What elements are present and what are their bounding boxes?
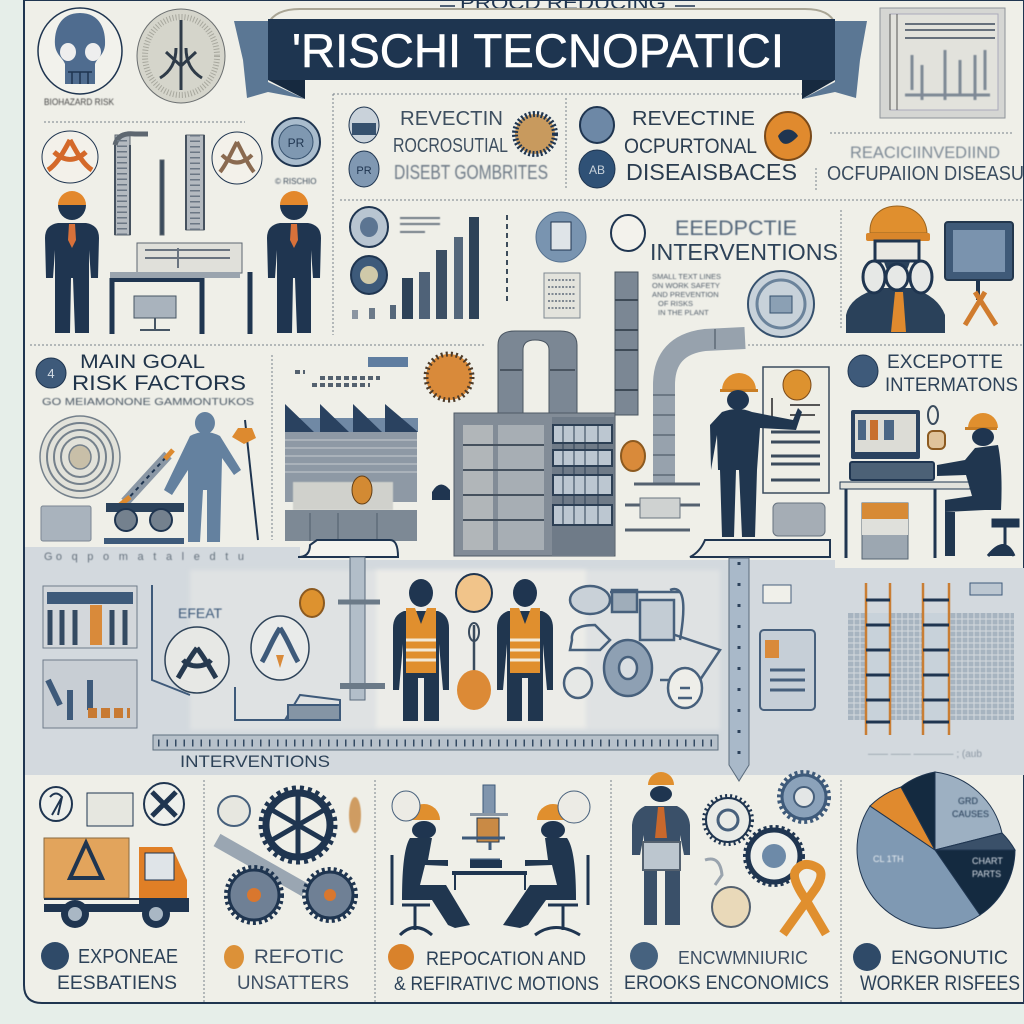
icon: biohazard dial [137, 9, 225, 103]
heading text: REVECTIN [400, 108, 503, 130]
label: REFOTIC [254, 947, 344, 968]
monitor [945, 222, 1013, 300]
heading text: EEEDPCTIE [675, 217, 797, 240]
label [853, 943, 1020, 995]
badge [848, 355, 878, 387]
label: EESBATIENS [57, 973, 177, 994]
panel: bar chart [350, 207, 479, 319]
ladder right [923, 583, 949, 735]
heading [885, 352, 1018, 396]
icon circles [350, 207, 388, 294]
desk [840, 482, 970, 558]
title banner: 'RISCHI TECNOPATICI [292, 24, 784, 77]
cabinet [862, 503, 908, 559]
icon: document badge [536, 212, 586, 262]
icon set: PR [356, 165, 372, 177]
icon: second biohazard [251, 616, 309, 680]
heading: INTERMATONS [885, 375, 1018, 396]
pie labels [873, 796, 1003, 879]
workers in vests [393, 574, 553, 721]
pie labels: PARTS [972, 869, 1001, 879]
truck [44, 838, 189, 928]
central factory [432, 272, 745, 556]
icon: mallet [457, 623, 491, 710]
label: & REFIRATIVC MOTIONS [394, 974, 599, 995]
heading text: INTERVENTIONS [650, 239, 838, 265]
hard hat [866, 206, 930, 241]
seated person [937, 413, 1018, 556]
body text lines: AND PREVENTION [652, 290, 719, 299]
conveyor arm [217, 840, 305, 890]
printer [773, 503, 825, 536]
icon: small orange coin [300, 589, 324, 617]
valve badge [621, 441, 645, 471]
label [624, 942, 829, 994]
side cabinet sketch [760, 585, 815, 710]
small icons [928, 406, 945, 449]
icon set: AB [589, 163, 605, 177]
worker left [45, 191, 99, 333]
panel: bottom ergonomics [624, 772, 829, 994]
text block: occupational disease [827, 143, 1024, 185]
label: ENGONUTIC [891, 948, 1008, 969]
coil [40, 416, 120, 498]
stack [615, 272, 638, 415]
icons [40, 783, 184, 826]
panel: reducing text block B [579, 107, 811, 188]
icon: maze badge [748, 271, 814, 337]
panel: reducing text block A [349, 107, 555, 187]
panel: executive interventions [773, 352, 1018, 559]
center stand [462, 785, 508, 868]
heading text: OCPURTONAL [624, 135, 757, 158]
grey interventions band [25, 547, 1024, 775]
table [452, 871, 527, 890]
small box [41, 506, 91, 541]
small machine sketch [152, 585, 340, 720]
desk with machine [110, 243, 250, 334]
worker right [267, 191, 321, 333]
heading: EXCEPOTTE [887, 352, 1003, 373]
T-connector right with arrow [690, 540, 830, 781]
icon: number badge [36, 358, 66, 388]
interventions label: INTERVENTIONS [180, 752, 330, 771]
pie labels: GRD [958, 796, 978, 806]
bars [352, 217, 479, 319]
worker figure [710, 373, 802, 537]
building [454, 413, 615, 556]
label [388, 944, 599, 995]
band heading text: EFEAT [178, 605, 223, 621]
pie chart [857, 772, 1015, 928]
grid panel [848, 613, 1014, 720]
keyboard [850, 462, 934, 480]
technical sheet [880, 8, 1005, 118]
vertical scale [506, 215, 508, 305]
chart legend lines [400, 218, 440, 232]
chart board [763, 367, 829, 493]
icon: skull [38, 8, 122, 94]
heading: MAIN GOAL [80, 352, 205, 373]
side machine [625, 484, 700, 530]
body text lines: IN THE PLANT [658, 308, 709, 317]
timeline bar [153, 735, 718, 750]
icon set [579, 107, 615, 188]
shelves [43, 586, 137, 728]
label: UNSATTERS [237, 973, 349, 994]
label: EXPONEAE [78, 946, 178, 968]
small caption under icons: BIOHAZARD RISK [44, 97, 114, 107]
heading text [611, 215, 838, 265]
body text lines: SMALL TEXT LINES [652, 272, 721, 281]
heading text: ROCROSUTIAL [393, 135, 508, 157]
body text lines: OF RISKS [658, 299, 693, 308]
duct [653, 329, 745, 484]
monitor [851, 410, 920, 459]
ladder left [866, 583, 890, 735]
pie labels: CL 1TH [873, 854, 904, 864]
dashed strip left [40, 570, 305, 576]
side note: © RISCHIO [275, 177, 316, 186]
icon set [349, 107, 379, 187]
panel: main goal risk factors [36, 352, 472, 544]
faint notes: —— —— ———— ; (aub [868, 749, 982, 760]
icon: number badge: 4 [47, 366, 55, 381]
panel: pie chart [853, 772, 1020, 995]
worker with laptop [632, 772, 690, 925]
small icons [218, 796, 361, 833]
panel: bottom truck [40, 783, 189, 994]
rod tool [232, 420, 258, 540]
small grid [544, 273, 580, 318]
heading text: REVECTINE [632, 108, 755, 130]
gears [704, 772, 829, 885]
wheel right [304, 869, 356, 921]
panel: worker with respirator [846, 206, 1013, 333]
respirator [863, 261, 932, 293]
text block: occupational disease: REACICIINVEDIIND [850, 143, 1000, 162]
small sketch [705, 859, 722, 885]
pie labels: CHART [972, 856, 1003, 866]
worker left vest [393, 579, 449, 721]
label [41, 942, 178, 994]
right machinery and grid [760, 583, 1014, 760]
small caption: GO MEIAMONONE GAMMONTUKOS [42, 397, 254, 408]
label: ENCWMNIURIC [678, 948, 808, 968]
tools [965, 292, 996, 325]
panel: bottom meeting [388, 785, 599, 995]
worker presenting [710, 367, 829, 537]
face and goggles [875, 241, 919, 281]
small icons [392, 791, 590, 823]
panel: effective interventions [507, 212, 838, 337]
icon: medal badge [272, 118, 320, 166]
dark hatch [432, 484, 450, 500]
heading: RISK FACTORS [72, 372, 246, 395]
heading text: DISEBT GOMBRITES [394, 162, 548, 184]
person blue grey [164, 412, 241, 542]
body text lines: ON WORK SAFETY [652, 281, 720, 290]
caption over band: Go q p o m a t a l e d t u [44, 551, 244, 563]
chimneys arch [498, 331, 577, 413]
worker body [846, 288, 945, 333]
seated worker right [503, 804, 588, 935]
title banner [234, 9, 867, 99]
icon: biohazard left [42, 131, 98, 183]
icon: mosaic badge [515, 114, 555, 154]
medal [712, 887, 750, 927]
T-connector left [298, 540, 398, 700]
icon: medal badge: PR [288, 136, 305, 150]
orange ribbon [783, 864, 826, 934]
heading text: DISEAISBACES [626, 159, 797, 185]
ventilation columns [115, 134, 204, 235]
tie [891, 292, 906, 332]
factory shed [285, 404, 418, 541]
gear large [261, 788, 335, 862]
label: REPOCATION AND [426, 949, 586, 970]
icon: large biohazard [165, 627, 229, 693]
icon: biohazard right [212, 132, 262, 184]
heading [72, 352, 246, 395]
pie labels: CAUSES [952, 809, 989, 819]
icon: orange badge [765, 112, 811, 160]
label: EROOKS ENCONOMICS [624, 973, 829, 994]
tag icon [970, 583, 1002, 595]
machine sketches right of workers [564, 586, 720, 708]
icon: badge between [456, 574, 492, 612]
label [224, 945, 349, 994]
heading text [624, 108, 797, 185]
worker right vest [497, 579, 553, 721]
body text lines [652, 272, 721, 317]
seated worker left [392, 804, 470, 935]
heading text [393, 108, 548, 184]
panel: bottom gears [217, 788, 361, 994]
panel: left top workers [42, 118, 321, 334]
wheel left [226, 867, 282, 923]
top-mid small parts [295, 354, 472, 400]
machine arm [104, 450, 184, 544]
